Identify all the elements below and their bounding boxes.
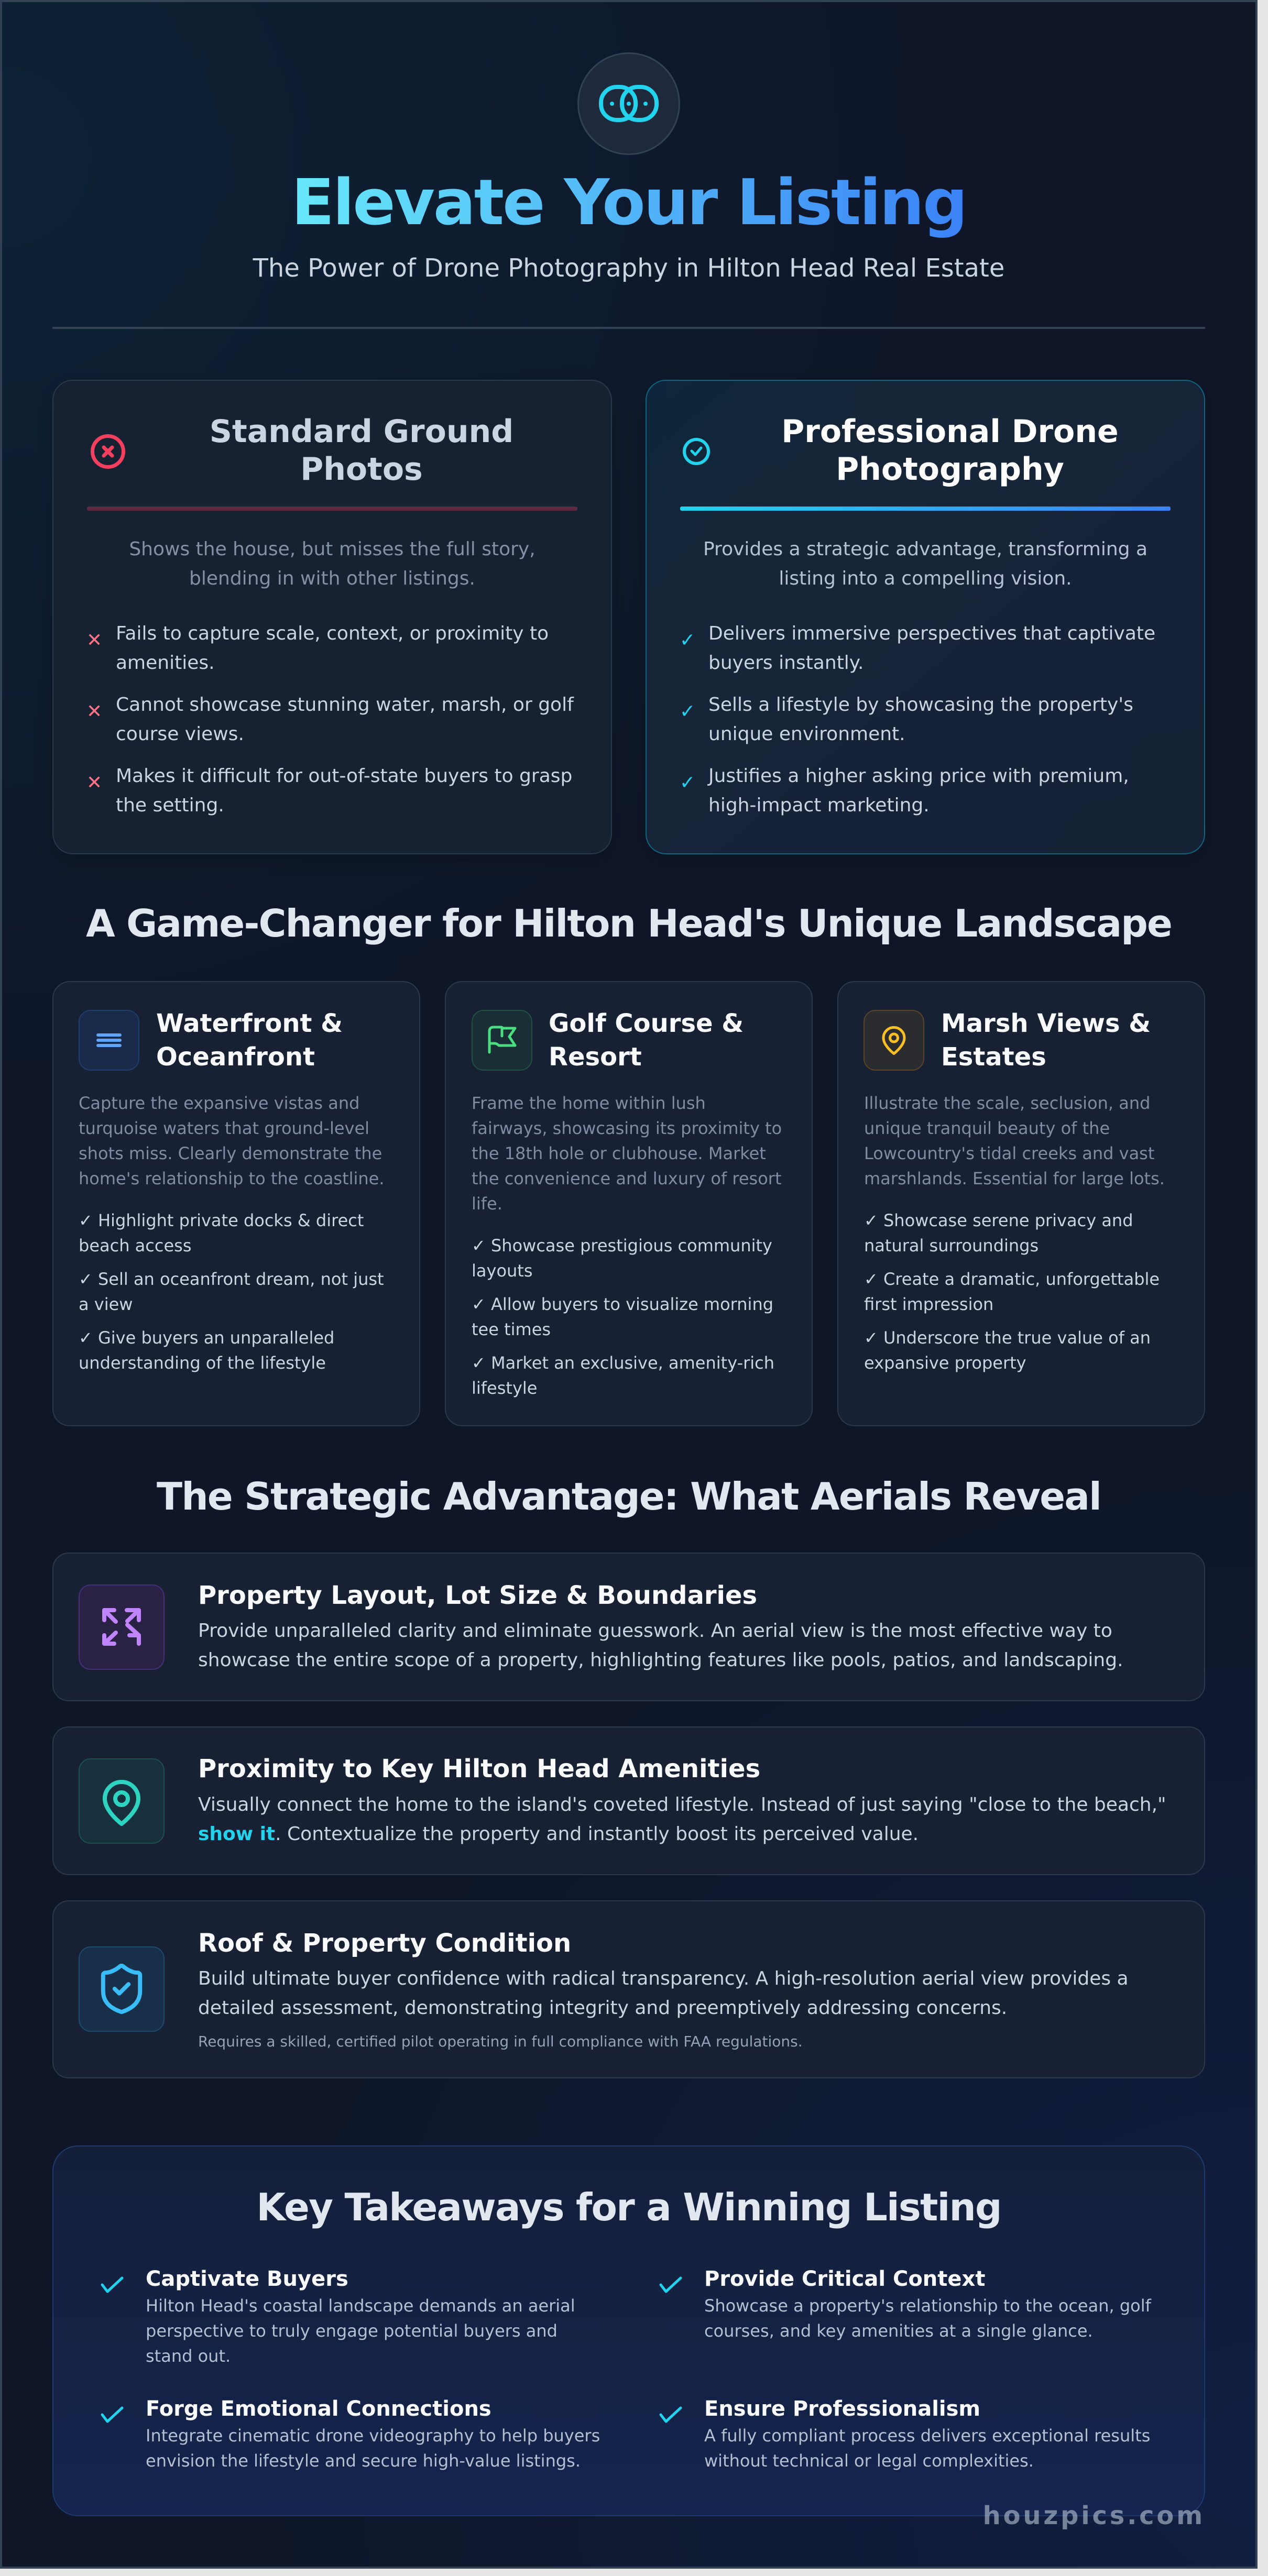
panel: marsh views and estates <box>838 982 1205 1426</box>
panel: professional drone photography <box>646 380 1205 854</box>
description <box>472 1093 782 1214</box>
text <box>198 1754 1166 1845</box>
feature list: a view <box>79 1294 133 1314</box>
heading: Golf Course & <box>549 1009 744 1038</box>
panel: standard ground photos <box>53 380 611 854</box>
list: drawbacks: the setting. <box>116 795 224 816</box>
takeaway: forge emotional connections: Forge Emotional Connections <box>146 2397 491 2421</box>
icon: expand arrows <box>79 1585 164 1669</box>
takeaway: provide critical context: courses, and key amenities at a single glance. <box>704 2321 1093 2341</box>
feature list: tee times <box>472 1319 551 1339</box>
takeaway: captivate buyers <box>102 2267 575 2366</box>
list: drawbacks: ✕ <box>86 630 102 651</box>
heading: Resort <box>549 1042 642 1072</box>
takeaway: provide critical context: Showcase a property's relationship to the ocean, golf <box>704 2296 1152 2316</box>
icon: x circle <box>92 436 124 467</box>
heading: professional drone photography: Photography <box>836 451 1064 488</box>
feature list: ✓ Market an exclusive, amenity-rich <box>472 1353 774 1373</box>
heading: professional drone photography: Professional Drone <box>781 413 1119 450</box>
heading: standard ground photos: Photos <box>300 451 423 488</box>
panel: waterfront and oceanfront <box>53 982 420 1426</box>
feature list: ✓ Highlight private docks & direct <box>79 1210 364 1230</box>
takeaway: provide critical context <box>661 2267 1152 2341</box>
list: benefits: ✓ <box>680 772 695 794</box>
takeaway: ensure professionalism: A fully compliant process delivers exceptional results <box>704 2426 1150 2446</box>
title: Elevate Your Listing <box>291 167 966 239</box>
list: drawbacks: amenities. <box>116 652 215 674</box>
heading: Marsh Views & <box>941 1009 1151 1038</box>
icon: location pin <box>79 1759 164 1843</box>
text: show it. Contextualize the property and instantly boost its perceived value. <box>198 1823 919 1845</box>
description <box>129 538 535 589</box>
takeaway: captivate buyers: perspective to truly engage potential buyers and <box>146 2321 558 2341</box>
description: Illustrate the scale, seclusion, and <box>864 1093 1150 1113</box>
list: benefits: Sells a lifestyle by showcasing the property's <box>708 694 1133 715</box>
description: Capture the expansive vistas and <box>79 1093 359 1113</box>
description: the convenience and luxury of resort <box>472 1169 782 1188</box>
text: Proximity to Key Hilton Head Amenities <box>198 1754 760 1784</box>
description <box>864 1093 1165 1188</box>
feature list: ✓ Showcase prestigious community <box>472 1236 772 1256</box>
description: the 18th hole or clubhouse. Market <box>472 1143 766 1163</box>
takeaway: ensure professionalism: Ensure Professionalism <box>704 2397 980 2421</box>
heading <box>941 1009 1151 1072</box>
subtitle: The Power of Drone Photography in Hilton Head Real Estate <box>253 254 1004 283</box>
feature list: layouts <box>472 1261 533 1281</box>
description: Lowcountry's tidal creeks and vast <box>864 1143 1154 1163</box>
takeaway: forge emotional connections: envision the lifestyle and secure high-value listings. <box>146 2451 581 2471</box>
list: benefits: Delivers immersive perspectives that captivate <box>708 623 1155 644</box>
icon: shield check <box>79 1947 164 2031</box>
heading: Estates <box>941 1042 1046 1072</box>
heading: Oceanfront <box>156 1042 315 1072</box>
heading: standard ground photos: Standard Ground <box>210 413 513 450</box>
text <box>198 1581 1123 1671</box>
list: drawbacks: course views. <box>116 723 244 745</box>
list: drawbacks: Cannot showcase stunning water, marsh, or golf <box>116 694 574 715</box>
feature list: ✓ Showcase serene privacy and <box>864 1210 1133 1230</box>
description: listing into a compelling vision. <box>779 568 1072 589</box>
icon: map pin <box>864 1010 924 1070</box>
icon: waves <box>79 1010 139 1070</box>
feature list: ✓ Create a dramatic, unforgettable <box>864 1269 1160 1289</box>
description: Provides a strategic advantage, transforming a <box>703 538 1147 560</box>
feature list: ✓ Sell an oceanfront dream, not just <box>79 1269 384 1289</box>
icon: drone <box>578 53 679 154</box>
list: benefits: Justifies a higher asking price with premium, <box>707 765 1129 787</box>
description: marshlands. Essential for large lots. <box>864 1169 1165 1188</box>
heading <box>549 1009 744 1072</box>
list: benefits: high-impact marketing. <box>708 795 930 816</box>
takeaway: ensure professionalism <box>661 2397 1150 2471</box>
panel: golf course and resort <box>445 982 812 1426</box>
list: benefits: ✓ <box>680 630 695 651</box>
text: showcase the entire scope of a property, highlighting features like pools, patios, and landscaping. <box>198 1649 1123 1671</box>
description: home's relationship to the coastline. <box>79 1169 385 1188</box>
feature list: ✓ Give buyers an unparalleled <box>79 1328 334 1348</box>
takeaway: captivate buyers: Captivate Buyers <box>146 2267 348 2291</box>
header <box>253 53 1004 283</box>
takeaway: forge emotional connections <box>102 2397 600 2471</box>
icon: flag <box>472 1010 532 1070</box>
panel: roof and property condition <box>53 1901 1205 2078</box>
description: shots miss. Clearly demonstrate the <box>79 1143 382 1163</box>
description <box>79 1093 385 1188</box>
text: Roof & Property Condition <box>198 1929 571 1958</box>
text: Visually connect the home to the island's coveted lifestyle. Instead of just saying "close to the beach," <box>198 1794 1166 1815</box>
panel: property layout <box>53 1553 1205 1701</box>
description: fairways, showcasing its proximity to <box>472 1118 782 1138</box>
text: Build ultimate buyer confidence with radical transparency. A high-resolution aerial view provides a <box>198 1968 1129 1989</box>
text <box>198 1929 1129 2050</box>
feature list: expansive property <box>864 1353 1026 1373</box>
feature list: first impression <box>864 1294 993 1314</box>
feature list <box>472 1236 774 1398</box>
heading <box>156 1009 343 1072</box>
feature list: understanding of the lifestyle <box>79 1353 326 1373</box>
feature list <box>864 1210 1160 1373</box>
takeaway: forge emotional connections: Integrate cinematic drone videography to help buyers <box>146 2426 600 2446</box>
text: detailed assessment, demonstrating integrity and preemptively addressing concerns. <box>198 1997 1007 2019</box>
description: Shows the house, but misses the full story, <box>129 538 535 560</box>
panel: key takeaways <box>53 2146 1205 2516</box>
feature list: lifestyle <box>472 1378 537 1398</box>
list: drawbacks <box>86 623 574 816</box>
list: drawbacks: ✕ <box>86 772 102 794</box>
text: Requires a skilled, certified pilot operating in full compliance with FAA regulations. <box>198 2033 803 2050</box>
list: benefits <box>680 623 1155 816</box>
heading: strategic advantage: The Strategic Advantage: What Aerials Reveal <box>157 1474 1101 1518</box>
text: Property Layout, Lot Size & Boundaries <box>198 1581 757 1610</box>
description: life. <box>472 1194 502 1214</box>
heading: standard ground photos <box>210 413 513 488</box>
list: benefits: ✓ <box>680 701 695 722</box>
list: benefits: buyers instantly. <box>708 652 863 674</box>
takeaway: captivate buyers: Hilton Head's coastal landscape demands an aerial <box>146 2296 575 2316</box>
description: Frame the home within lush <box>472 1093 706 1113</box>
heading: professional drone photography <box>781 413 1119 488</box>
list: drawbacks: Makes it difficult for out-of-state buyers to grasp <box>116 765 572 787</box>
list: drawbacks: Fails to capture scale, context, or proximity to <box>116 623 549 644</box>
takeaway: ensure professionalism: without technical or legal complexities. <box>704 2451 1034 2471</box>
description: blending in with other listings. <box>189 568 475 589</box>
list: benefits: unique environment. <box>708 723 905 745</box>
description: unique tranquil beauty of the <box>864 1118 1110 1138</box>
heading: unique landscape: A Game-Changer for Hilton Head's Unique Landscape <box>86 901 1172 945</box>
takeaway: captivate buyers: stand out. <box>146 2346 231 2366</box>
heading: Waterfront & <box>156 1009 343 1038</box>
feature list: ✓ Underscore the true value of an <box>864 1328 1151 1348</box>
watermark: houzpics.com <box>983 2501 1205 2530</box>
feature list: beach access <box>79 1236 191 1256</box>
description: turquoise waters that ground-level <box>79 1118 369 1138</box>
takeaway: provide critical context: Provide Critical Context <box>704 2267 985 2291</box>
feature list: ✓ Allow buyers to visualize morning <box>472 1294 773 1314</box>
list: drawbacks: ✕ <box>86 701 102 722</box>
description <box>703 538 1147 589</box>
feature list: natural surroundings <box>864 1236 1039 1256</box>
heading: Key Takeaways for a Winning Listing <box>256 2185 1001 2229</box>
icon: check circle <box>684 439 708 464</box>
panel: proximity to amenities <box>53 1727 1205 1875</box>
text: Provide unparalleled clarity and eliminate guesswork. An aerial view is the most effective way to <box>198 1620 1112 1642</box>
feature list <box>79 1210 384 1373</box>
